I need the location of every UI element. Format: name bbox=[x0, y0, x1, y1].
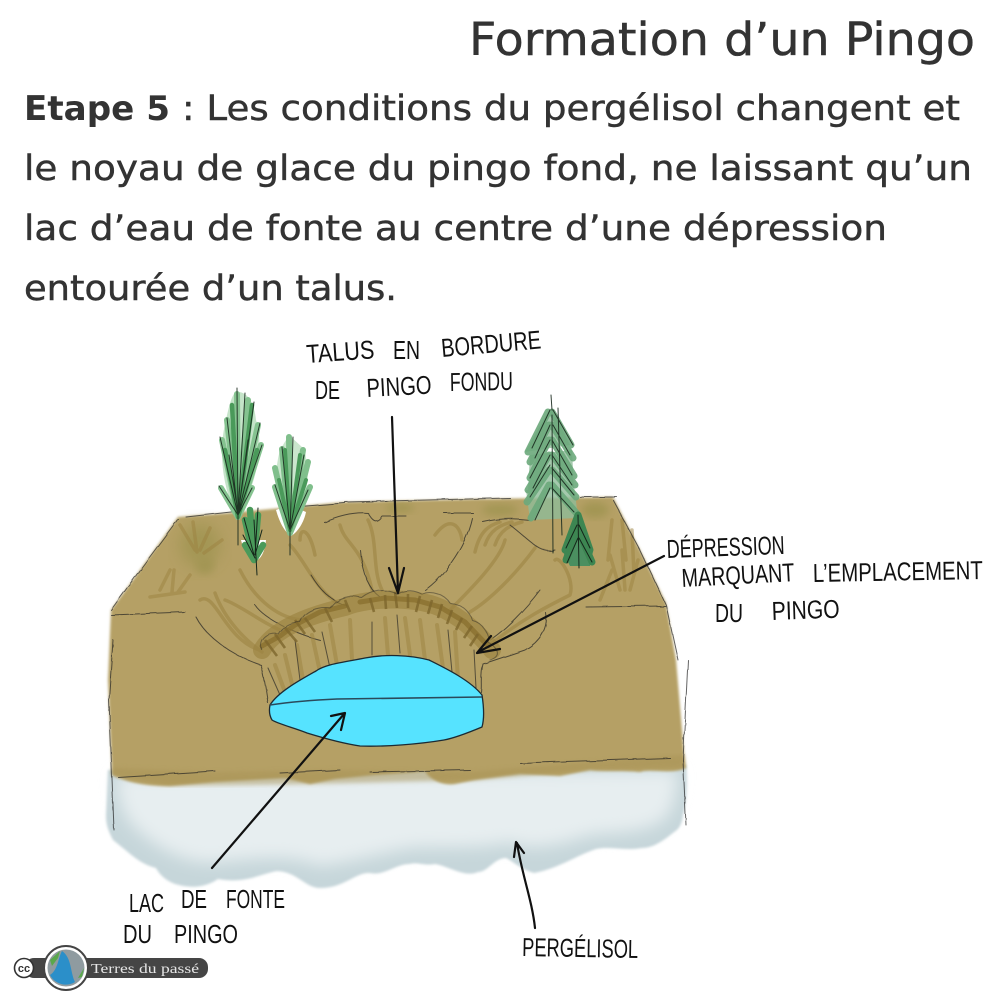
logo: Terres du passé bbox=[14, 946, 208, 990]
talus word 5: PINGO bbox=[366, 370, 432, 403]
tree: small right fir bbox=[563, 512, 593, 568]
arrow: lake bbox=[212, 713, 345, 868]
meltwater lake bbox=[269, 656, 484, 746]
tree: right pine of left group bbox=[275, 435, 310, 555]
crater sketch lines bbox=[109, 497, 688, 830]
talus word 3: BORDURE bbox=[440, 324, 542, 363]
title: Formation d’un Pingo bbox=[469, 13, 975, 66]
crater inner wall streaks bbox=[275, 618, 458, 692]
tree: tall right fir bbox=[525, 395, 578, 553]
description line 1: : Les conditions du pergélisol changent et bbox=[182, 89, 960, 129]
talus ridge bbox=[261, 590, 497, 660]
tree: tall left pine bbox=[219, 388, 262, 545]
crater slope streaks bbox=[200, 520, 571, 652]
description text bbox=[24, 89, 972, 309]
soil block bbox=[108, 497, 686, 786]
description line 2: le noyau de glace du pingo fond, ne laissant qu’un bbox=[24, 149, 972, 189]
depression word 5: PINGO bbox=[771, 594, 840, 626]
lake word 2: DE bbox=[181, 884, 207, 914]
lake word 5: PINGO bbox=[174, 919, 238, 949]
logo: Terres du passé: cc bbox=[18, 963, 30, 975]
lake word 4: DU bbox=[123, 919, 152, 949]
logo: Terres du passé: Terres du passé bbox=[91, 962, 199, 977]
grass tufts bbox=[150, 520, 638, 600]
arrow: depression bbox=[477, 556, 664, 653]
lower soil band bbox=[112, 755, 684, 786]
block diagram of the melted pingo bbox=[106, 388, 688, 888]
lake surface line bbox=[270, 697, 482, 705]
depression word 1: DÉPRESSION bbox=[666, 530, 785, 564]
description line 3: lac d’eau de fonte au centre d’une dépression bbox=[24, 209, 887, 249]
label: permafrost: PERGÉLISOL bbox=[522, 932, 638, 964]
talus word 1: TALUS bbox=[305, 334, 375, 369]
permafrost layer bbox=[106, 765, 687, 888]
talus word 2: EN bbox=[393, 335, 420, 365]
label: talus bbox=[305, 324, 542, 405]
arrow: permafrost bbox=[514, 842, 535, 928]
lake word 3: FONTE bbox=[226, 884, 285, 914]
tree: small left pine bbox=[241, 508, 266, 575]
talus word 4: DE bbox=[315, 375, 340, 405]
moss patches bbox=[180, 502, 609, 574]
arrow: talus bbox=[389, 417, 404, 593]
label: lake bbox=[123, 884, 285, 949]
depression word 2: MARQUANT bbox=[681, 557, 795, 593]
description line 4: entourée d’un talus. bbox=[24, 269, 397, 309]
step label: Etape 5 bbox=[24, 89, 170, 129]
talus word 6: FONDU bbox=[450, 366, 513, 397]
depression word 4: DU bbox=[715, 598, 743, 628]
label: depression bbox=[666, 530, 983, 628]
lake word 1: LAC bbox=[129, 888, 164, 918]
